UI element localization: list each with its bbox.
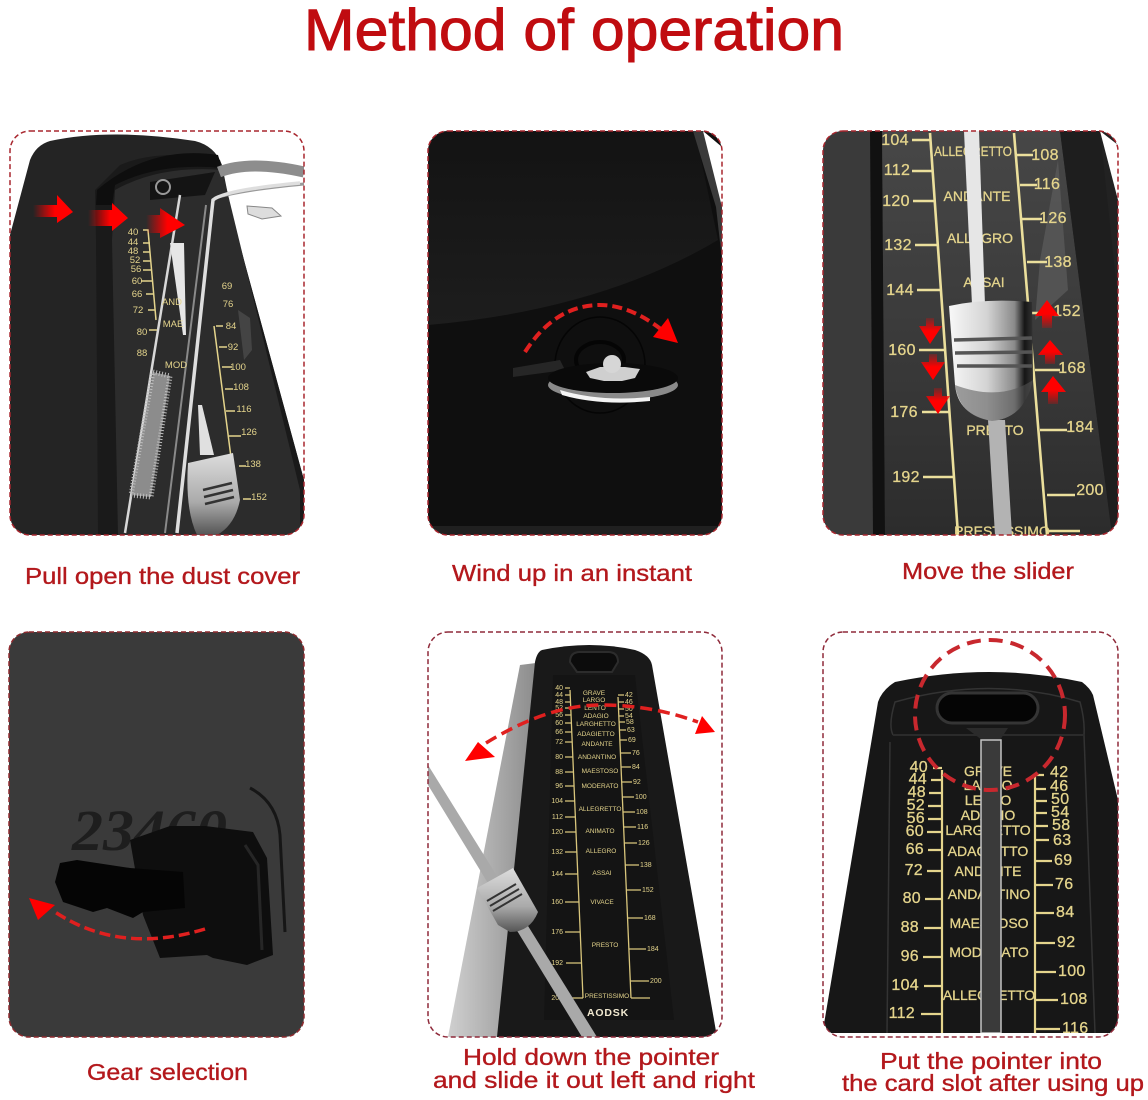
panel: move the slider <box>823 131 1118 539</box>
scale labels: ANDANTE <box>581 741 613 748</box>
gear numbers: 23460 <box>71 798 227 863</box>
scale labels: 54 <box>1051 804 1069 821</box>
scale labels: 72 <box>905 862 923 879</box>
scale labels: 80 <box>137 327 147 338</box>
scale labels: 108 <box>636 809 648 816</box>
pointer rod <box>964 131 1012 535</box>
scale ticks <box>921 768 1060 1033</box>
scale labels: 152 <box>1053 303 1081 320</box>
panel: gear selection <box>9 632 304 1037</box>
scale labels: 92 <box>1057 934 1075 951</box>
scale labels: VIVACE <box>590 899 614 906</box>
scale labels: 192 <box>892 469 920 486</box>
panel: put the pointer into the card slot <box>823 632 1118 1039</box>
scale labels: LARGHETTO <box>945 822 1031 838</box>
scale labels: 176 <box>890 404 918 421</box>
scale labels: 160 <box>551 899 563 906</box>
scale labels: 184 <box>647 946 659 953</box>
scale labels: MODERATO <box>582 783 618 790</box>
scale ticks <box>912 133 1080 535</box>
scale labels: PRESTO <box>966 422 1024 438</box>
scale labels: AND <box>162 297 182 308</box>
scale labels: 46 <box>625 699 633 706</box>
scale labels: PRESTO <box>592 942 618 949</box>
scale labels: 48 <box>555 699 563 706</box>
scale labels: 168 <box>1058 360 1086 377</box>
gear mechanism <box>55 788 285 965</box>
caption: Pull open the dust cover <box>25 563 300 589</box>
scale labels: 60 <box>906 823 924 840</box>
scale labels: 120 <box>882 193 910 210</box>
scale labels: 84 <box>632 764 640 771</box>
scale labels: ANIMATO <box>585 828 615 835</box>
scale labels: 144 <box>886 282 914 299</box>
scale labels: 208 <box>551 995 563 1002</box>
scale labels: PRESTISSIMO <box>954 523 1050 539</box>
scale labels: GRAVE <box>583 690 606 697</box>
scale labels: 132 <box>884 237 912 254</box>
scale labels: 42 <box>625 692 633 699</box>
scale labels: 60 <box>555 720 563 727</box>
scale labels: ADAGIO <box>961 807 1015 823</box>
scale labels: 44 <box>128 237 138 248</box>
scale ticks <box>565 688 650 998</box>
card slot <box>937 693 1038 723</box>
caption: Put the pointer into <box>880 1048 1102 1074</box>
scale labels: ALLEGRETTO <box>943 987 1035 1003</box>
scale labels: 48 <box>908 784 926 801</box>
scale labels: MAE <box>163 319 183 330</box>
scale labels: 160 <box>888 342 916 359</box>
scale labels: 40 <box>910 759 928 776</box>
scale labels: 112 <box>884 162 910 179</box>
brand: AODSK <box>587 1007 629 1019</box>
scale labels: MAESTOSO <box>949 915 1029 931</box>
scale labels: 84 <box>226 321 236 332</box>
scale labels: LARGO <box>963 777 1013 793</box>
scale labels: PRESTISSIMO <box>585 993 629 1000</box>
scale labels: MODERATO <box>949 944 1029 960</box>
scale labels <box>881 132 1104 539</box>
panel: hold down the pointer <box>428 632 722 1037</box>
scale labels: 108 <box>1060 991 1088 1008</box>
caption: Wind up in an instant <box>452 560 693 586</box>
scale labels: 40 <box>555 685 563 692</box>
scale labels: ANDANTE <box>944 188 1010 204</box>
scale labels: 69 <box>222 281 232 292</box>
caption: and slide it out left and right <box>433 1067 756 1093</box>
scale labels: 42 <box>1050 764 1068 781</box>
scale labels: ALLEGRETTO <box>934 143 1012 159</box>
scale labels: 112 <box>889 1005 915 1022</box>
scale labels: 192 <box>551 960 563 967</box>
scale labels: 40 <box>128 227 138 238</box>
scale labels: 76 <box>223 299 233 310</box>
slider weight <box>187 453 240 535</box>
scale labels: 138 <box>1044 254 1072 271</box>
caption: Gear selection <box>87 1059 248 1085</box>
scale labels: LARGHETTO <box>576 721 616 728</box>
scale labels: 69 <box>628 737 636 744</box>
scale labels <box>889 759 1088 1037</box>
scale labels: 72 <box>555 739 563 746</box>
scale labels: 132 <box>551 849 563 856</box>
scale labels: ADAGIO <box>583 713 609 720</box>
pointer <box>428 765 597 1037</box>
scale labels: 126 <box>1039 210 1067 227</box>
scale labels: 116 <box>637 824 648 831</box>
scale labels: 44 <box>555 692 563 699</box>
scale labels: GRAVE <box>964 763 1012 779</box>
scale labels: MOD <box>165 360 187 371</box>
spring comb <box>131 372 170 497</box>
scale labels: 100 <box>1058 963 1086 980</box>
scale labels: LARGO <box>583 697 605 704</box>
scale labels: ASSAI <box>592 870 612 877</box>
scale labels: 138 <box>640 862 652 869</box>
scale labels: 92 <box>228 342 238 353</box>
scale labels: 104 <box>551 798 563 805</box>
scale labels: 66 <box>132 289 142 300</box>
scale labels: ADAGIETTO <box>948 843 1028 859</box>
red arrows <box>33 195 185 238</box>
scale labels: ADAGIETTO <box>577 731 615 738</box>
scale labels: 54 <box>625 713 633 720</box>
scale labels: 108 <box>1031 147 1059 164</box>
scale labels: 116 <box>1034 176 1060 193</box>
scale labels: 56 <box>555 712 563 719</box>
panel: pull open the dust cover <box>10 131 304 535</box>
scale labels: 126 <box>241 427 257 438</box>
scale labels: 152 <box>642 887 654 894</box>
red arrows <box>919 300 1066 414</box>
scale labels: 138 <box>245 459 261 470</box>
scale labels: 58 <box>626 719 634 726</box>
scale labels: 48 <box>128 246 138 257</box>
scale labels <box>128 227 267 503</box>
scale labels: 100 <box>635 794 647 801</box>
red dashed circle <box>915 640 1065 790</box>
scale labels: 88 <box>901 919 919 936</box>
scale labels: 80 <box>555 754 563 761</box>
scale labels: 63 <box>627 727 635 734</box>
scale labels: 200 <box>650 978 662 985</box>
scale labels: 104 <box>891 977 919 994</box>
scale labels: 50 <box>625 706 633 713</box>
scale labels: LENTO <box>965 792 1011 808</box>
scale labels: 108 <box>233 382 249 393</box>
scale labels: 76 <box>632 750 640 757</box>
scale labels: 56 <box>907 810 925 827</box>
scale labels: 144 <box>551 871 563 878</box>
scale labels: ALLEGRETTO <box>579 806 621 813</box>
scale labels: 184 <box>1066 419 1094 436</box>
pointer rod <box>170 243 214 455</box>
scale labels: 152 <box>251 492 267 503</box>
scale labels: 52 <box>555 705 563 712</box>
winding key <box>513 317 678 413</box>
scale labels: 72 <box>133 305 143 316</box>
panel: wind up <box>428 131 722 536</box>
scale labels: 66 <box>555 729 563 736</box>
pointer <box>966 728 1008 1033</box>
scale labels <box>551 685 662 1002</box>
scale labels: 176 <box>551 929 563 936</box>
scale labels: 66 <box>906 841 924 858</box>
red dashed arrows <box>465 705 715 761</box>
scale labels: 76 <box>1055 876 1073 893</box>
red rotation arrow <box>525 305 678 352</box>
scale labels: 44 <box>909 771 927 788</box>
scale labels: ALLEGRO <box>586 848 616 855</box>
scale labels: 116 <box>1062 1020 1088 1037</box>
slider weight <box>949 301 1033 421</box>
caption: Move the slider <box>902 558 1074 584</box>
scale labels: 88 <box>555 769 563 776</box>
scale labels: 168 <box>644 915 656 922</box>
scale labels: 116 <box>236 404 252 415</box>
scale labels: 58 <box>1052 817 1070 834</box>
scale labels: ANDANTINO <box>578 754 616 761</box>
scale labels: 80 <box>903 890 921 907</box>
scale labels: ASSAI <box>963 274 1005 290</box>
scale labels: 92 <box>633 779 641 786</box>
scale labels: LENTO <box>584 705 606 712</box>
scale labels: 50 <box>1051 791 1069 808</box>
red dashed arrow <box>29 898 205 939</box>
scale labels: 100 <box>230 362 246 373</box>
scale labels: ANDANTINO <box>948 886 1030 902</box>
scale labels: ANDANTE <box>955 863 1021 879</box>
caption: Hold down the pointer <box>463 1044 719 1070</box>
dust cover <box>125 166 304 533</box>
scale labels: 88 <box>137 348 147 359</box>
caption: the card slot after using up <box>842 1070 1144 1096</box>
scale labels: 63 <box>1053 832 1071 849</box>
scale labels: 84 <box>1056 904 1074 921</box>
scale labels: 112 <box>552 814 563 821</box>
scale labels: 104 <box>881 132 909 149</box>
scale labels: 120 <box>551 829 563 836</box>
scale labels: MAESTOSO <box>582 768 618 775</box>
scale labels: 60 <box>132 276 142 287</box>
scale labels: 69 <box>1054 852 1072 869</box>
scale labels: 56 <box>131 264 141 275</box>
scale labels: 96 <box>555 783 563 790</box>
scale labels: 96 <box>901 948 919 965</box>
scale labels: 200 <box>1076 482 1104 499</box>
scale labels: 46 <box>1050 778 1068 795</box>
scale labels: ALLEGRO <box>947 230 1013 246</box>
scale labels: 126 <box>638 840 650 847</box>
scale labels: 52 <box>907 797 925 814</box>
scale labels: 52 <box>130 255 140 266</box>
